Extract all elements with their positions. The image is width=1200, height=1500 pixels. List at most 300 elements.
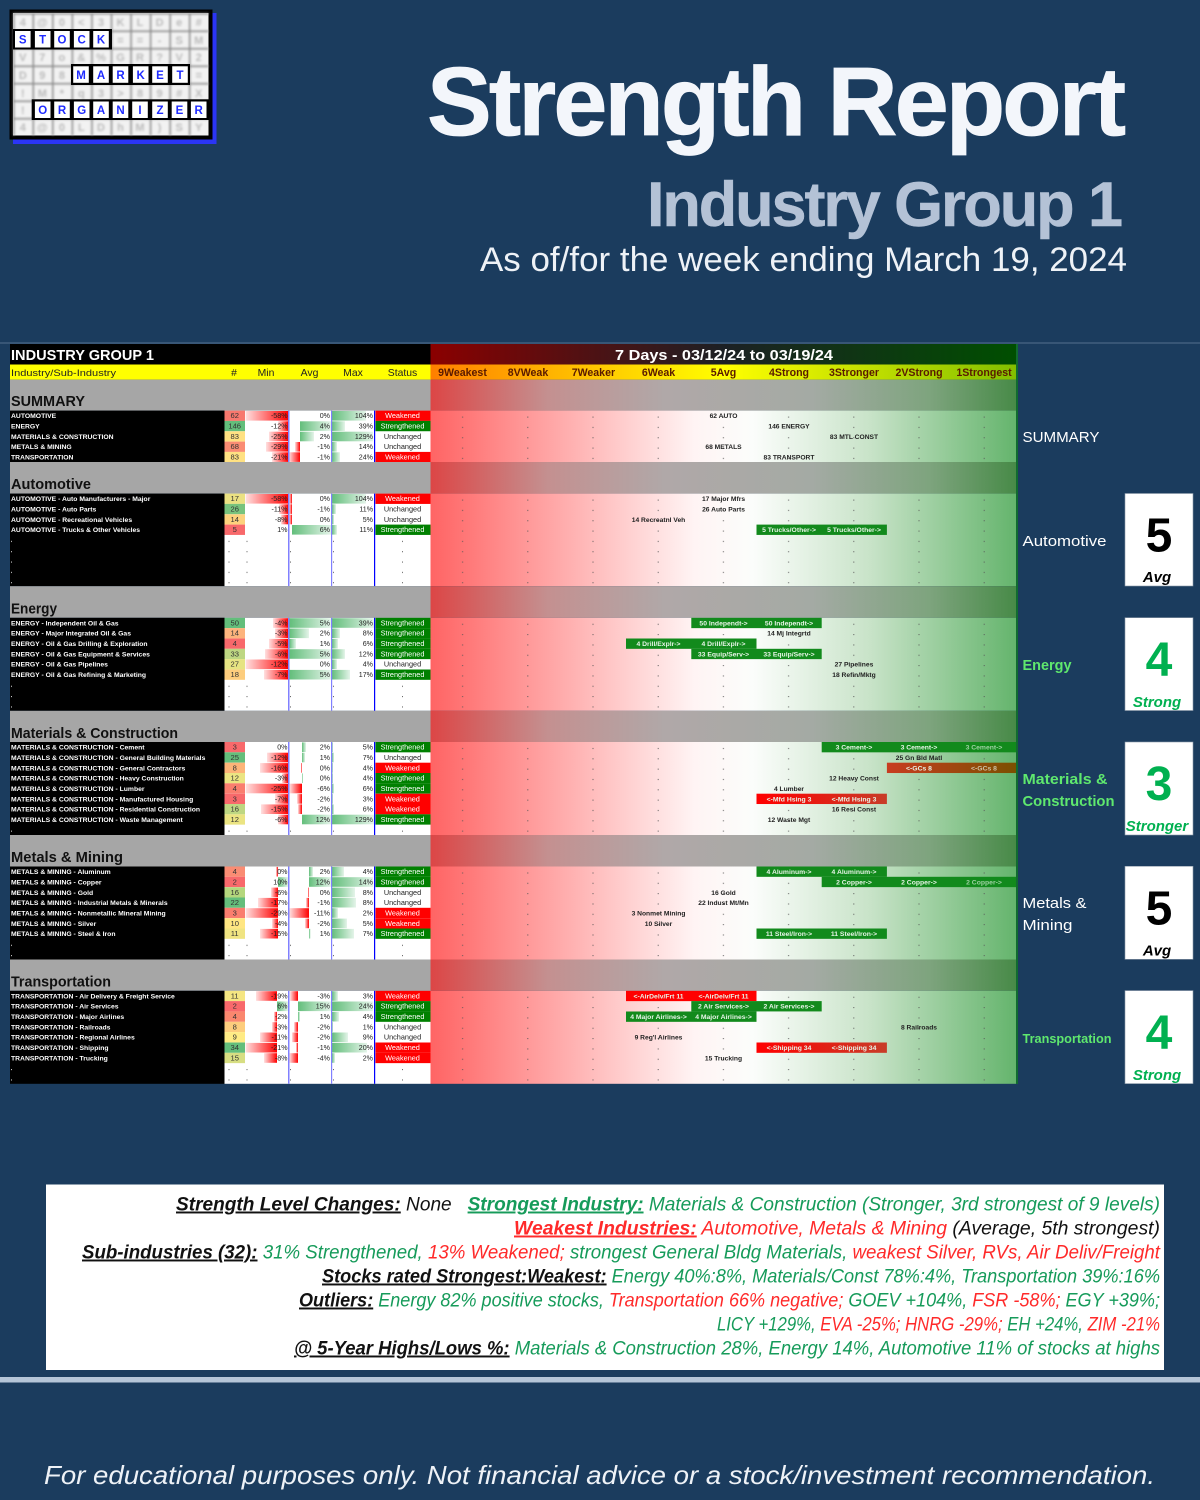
row: Major Integrated Oil & Gas: 8% [363, 630, 374, 638]
row: Auto Manufacturers: 104% [355, 495, 374, 503]
row: Silver: 5% [363, 920, 374, 928]
row: Shipping: 34 [230, 1043, 239, 1052]
row: General Building Materials: 7% [363, 754, 374, 762]
side label: Automotive: Automotive [1022, 533, 1106, 550]
row: Aluminum: 2% [320, 868, 331, 876]
row: Recreational Vehicles: 0% [320, 516, 331, 524]
row: Metals & Mining: 68 [230, 442, 239, 451]
score card: Energy: Strong [1133, 694, 1181, 711]
table header: Industry/Sub-Industry [11, 368, 116, 379]
row: Air Services: 24% [359, 1003, 374, 1011]
row: Cement: MATERIALS & CONSTRUCTION - Cement [11, 745, 145, 752]
table header: # [231, 368, 237, 379]
row: Regional Airlines: 9 Reg'l Airlines [635, 1035, 683, 1042]
row: Residential Construction [11, 804, 877, 814]
row: Cement: 5% [363, 744, 374, 752]
row: Air Delivery & Freight Service: -19% [271, 992, 288, 1000]
panel: commentary notes [46, 1184, 1164, 1370]
row: Trucks & Other Vehicles: 5 [233, 525, 237, 534]
score card: Transportation: 4 [1146, 1007, 1173, 1060]
row: Oil & Gas Pipelines: Unchanged [384, 660, 421, 669]
row: Oil & Gas Equipment & Services [11, 649, 822, 659]
row: Aluminum: 4 Aluminum-> [767, 869, 811, 876]
panel: Materials & Construction section [10, 711, 1018, 835]
row: Auto Parts: -1% [317, 506, 331, 514]
row: Copper: 10% [273, 878, 288, 886]
row: Trucks & Other Vehicles: 5 Trucks/Other-> [762, 527, 816, 534]
row: Energy [11, 421, 810, 431]
row: Auto Manufacturers: -58% [271, 495, 288, 503]
side label: Materials & Construction: Materials & [1022, 771, 1108, 788]
row: Oil & Gas Pipelines: 27 Pipelines [835, 662, 874, 669]
row: Heavy Construction: MATERIALS & CONSTRUCTION - Heavy Construction [11, 776, 184, 783]
score card: Automotive: Avg [1142, 569, 1171, 586]
row: Transportation: 24% [359, 454, 374, 462]
row: Residential Construction: 16 Resi Const [832, 807, 877, 814]
row: General Building Materials: 1% [320, 754, 331, 762]
row: Trucks & Other Vehicles: 6% [320, 526, 331, 534]
row: Independent Oil & Gas: 50 Independt-> [699, 620, 748, 627]
row: Trucking: 15 Trucking [705, 1055, 742, 1062]
row: Trucking [11, 1053, 742, 1063]
row: Manufactured Housing [11, 794, 887, 804]
row: Recreational Vehicles [11, 514, 685, 525]
row: Trucks & Other Vehicles: 5 Trucks/Other-> [827, 527, 881, 534]
row: Heavy Construction: 0% [320, 775, 331, 783]
row: Automotive [11, 411, 737, 421]
row: Steel & Iron: 11 Steel/Iron-> [766, 931, 812, 938]
row: Air Services: 2 [233, 1002, 237, 1011]
row: Gold: -6% [275, 889, 288, 897]
row: Waste Management: 129% [355, 816, 374, 824]
row: Waste Management: 12% [316, 816, 331, 824]
row: Automotive: 104% [355, 412, 374, 420]
row: Metals & Mining: 68 METALS [705, 444, 742, 451]
row: Recreational Vehicles: 14 Recreatnl Veh [632, 517, 685, 524]
row: Major Airlines: 4 [233, 1012, 237, 1021]
row: Trucks & Other Vehicles: 1% [277, 526, 288, 534]
heading: SUMMARY: SUMMARY [11, 393, 85, 410]
row: Industrial Metals & Minerals: 22 Indust Mt/Mn [698, 900, 749, 907]
row: Aluminum: 0% [277, 868, 288, 876]
table header: Max [343, 368, 364, 379]
row: Manufactured Housing: 3 [233, 794, 237, 803]
score card: Metals & Mining [1125, 866, 1193, 960]
logo: Stock Market Organizer: !M*q3>89#X [21, 88, 203, 100]
row: Air Delivery & Freight Service: Weakened [385, 991, 420, 1000]
row: Lumber: 4 [233, 784, 237, 793]
row: Steel & Iron: Strengthened [381, 929, 424, 938]
row: Lumber: -6% [317, 785, 331, 793]
row: Metals & Mining [11, 442, 742, 452]
row: Waste Management: MATERIALS & CONSTRUCTION - Waste Management [11, 817, 184, 824]
row: Industrial Metals & Minerals: 8% [363, 899, 374, 907]
row: Oil & Gas Equipment & Services: 33 Equip/Serv-> [763, 651, 815, 658]
row: Steel & Iron [11, 928, 887, 939]
row: Lumber: -25% [271, 785, 288, 793]
heading: Transportation: Transportation [11, 974, 111, 990]
row: Energy: 146 [228, 422, 241, 431]
score card: Materials & Construction [1125, 742, 1193, 835]
disclaimer footer: For educational purposes only. Not financial advice or a stock/investment recommendation. [44, 1460, 1155, 1490]
score card: Metals & Mining: Avg [1142, 942, 1171, 960]
table header [10, 344, 1018, 380]
row: Energy: Strengthened [381, 422, 424, 431]
row: Independent Oil & Gas [11, 618, 822, 628]
row: Auto Manufacturers: 17 Major Mfrs [702, 496, 745, 503]
row: Auto Parts [11, 504, 745, 514]
row: Oil & Gas Equipment & Services: 33 [230, 649, 239, 658]
row: Oil & Gas Refining & Marketing: 18 [230, 670, 239, 679]
row: Oil & Gas Drilling & Exploration: -5% [275, 640, 288, 648]
note: outliers: Outliers: Energy 82% positive stocks, Transportation 66% negative; GOEV +104%, FSR -58%; EGY +39%; [299, 1290, 1160, 1312]
row: Auto Parts: 26 [230, 505, 239, 514]
row: Automotive: Weakened [385, 411, 420, 420]
panel: Metals & Mining section [10, 835, 1018, 960]
row: Air Services: 2 Air Services-> [698, 1004, 749, 1011]
row: Regional Airlines: Unchanged [384, 1033, 421, 1042]
row: Materials & Construction: MATERIALS & CONSTRUCTION [11, 434, 114, 441]
row: Industrial Metals & Minerals: -17% [271, 899, 288, 907]
row: Major Integrated Oil & Gas: ENERGY - Major Integrated Oil & Gas [11, 631, 131, 638]
row: Waste Management: 12 Waste Mgt [768, 817, 811, 824]
row: Oil & Gas Drilling & Exploration: 1% [320, 640, 331, 648]
side label: Transportation: Transportation [1022, 1032, 1112, 1046]
row: Oil & Gas Refining & Marketing: ENERGY - Oil & Gas Refining & Marketing [11, 672, 146, 679]
row: Gold: 8% [363, 889, 374, 897]
row: Metals & Mining: -29% [271, 443, 288, 451]
row: Regional Airlines: 9 [233, 1033, 237, 1042]
row: Heavy Construction: 4% [363, 775, 374, 783]
row: Residential Construction: 6% [363, 806, 374, 814]
logo: Stock Market Organizer: ! [21, 105, 25, 117]
row: Oil & Gas Drilling & Exploration: 6% [363, 640, 374, 648]
table header: 4Strong [769, 367, 809, 379]
row: Regional Airlines: 9% [363, 1034, 374, 1042]
row: Recreational Vehicles: 14 [230, 515, 239, 524]
row: Aluminum [11, 866, 887, 877]
row: Energy: 39% [359, 423, 374, 431]
logo: Stock Market Organizer [10, 10, 216, 144]
row: Railroads: Unchanged [384, 1022, 421, 1031]
row: Oil & Gas Refining & Marketing [11, 670, 876, 680]
row: Transportation: 83 TRANSPORT [764, 455, 815, 462]
divider line [0, 342, 1200, 344]
side label: Energy: Energy [1022, 657, 1072, 674]
table header: 8VWeak [508, 367, 548, 379]
row: Major Integrated Oil & Gas: 14 [230, 629, 239, 638]
row: Gold: 16 [230, 888, 239, 897]
row: Silver: Weakened [385, 919, 420, 928]
row: Major Airlines: TRANSPORTATION - Major Airlines [11, 1014, 124, 1021]
row: Residential Construction: Weakened [385, 805, 420, 814]
score card: Energy [1125, 618, 1193, 711]
row: Air Services: 6% [277, 1003, 288, 1011]
row: Transportation: 83 [230, 453, 239, 462]
row: Copper [11, 877, 1017, 887]
row: Oil & Gas Pipelines [11, 659, 874, 669]
logo: Stock Market Organizer: MARKET [76, 70, 184, 82]
side label: Metals & Mining: Mining [1022, 917, 1072, 934]
row: Oil & Gas Pipelines: -12% [271, 661, 288, 669]
row: Copper: 2 [233, 877, 237, 886]
row: General Contractors: <-GCs 8 [906, 765, 932, 772]
row: Waste Management [11, 814, 811, 825]
row: Aluminum: METALS & MINING - Aluminum [11, 869, 111, 876]
row: Waste Management: 12 [230, 815, 239, 824]
row: Oil & Gas Equipment & Services: 12% [359, 650, 374, 658]
row: Regional Airlines: TRANSPORTATION - Regional Airlines [11, 1035, 135, 1042]
row: Transportation: -1% [317, 454, 331, 462]
row: Railroads: -3% [275, 1023, 288, 1031]
row: Metals & Mining: Unchanged [384, 442, 421, 451]
row: Shipping: -1% [317, 1044, 331, 1052]
row: Nonmetallic Mineral Mining: 3 Nonmet Mining [632, 910, 685, 917]
row: Silver: METALS & MINING - Silver [11, 921, 97, 928]
row: Auto Manufacturers: Weakened [385, 494, 420, 503]
row: General Building Materials: -12% [271, 754, 288, 762]
row: Gold: Unchanged [384, 888, 421, 897]
row: Oil & Gas Drilling & Exploration: 4 Drill/Explr-> [701, 641, 746, 648]
row: Manufactured Housing: <-Mfd Hsing 3 [832, 796, 877, 803]
row: Heavy Construction: -3% [275, 775, 288, 783]
row: Automotive: 62 AUTO [710, 413, 737, 420]
side label: Metals & Mining: Metals & [1022, 895, 1086, 912]
row: Auto Manufacturers [11, 494, 745, 504]
row: Nonmetallic Mineral Mining: 2% [363, 909, 374, 917]
score card: Materials & Construction: Stronger [1126, 818, 1189, 835]
row: General Building Materials: MATERIALS & CONSTRUCTION - General Building Materials [11, 755, 206, 762]
row: Railroads [11, 1022, 937, 1032]
row: Lumber: Strengthened [381, 784, 424, 793]
score card: Automotive: 5 [1146, 510, 1172, 562]
row: Automotive: 0% [320, 412, 331, 420]
row: Shipping: <-Shipping 34 [832, 1045, 877, 1052]
table header: 5Avg [711, 367, 736, 379]
side label: Metals & Mining [1022, 895, 1086, 934]
row: Major Integrated Oil & Gas [11, 628, 811, 638]
row: Cement: 3 [233, 743, 237, 752]
row: Trucks & Other Vehicles: 11% [359, 526, 374, 534]
row: Nonmetallic Mineral Mining: 3 [233, 908, 237, 917]
row: Copper: METALS & MINING - Copper [11, 879, 102, 886]
row: Silver: -2% [317, 920, 331, 928]
table header: Status [388, 368, 417, 379]
row: Steel & Iron: 1% [320, 930, 331, 938]
row: Steel & Iron: 11 Steel/Iron-> [831, 931, 877, 938]
row: Shipping: Weakened [385, 1043, 420, 1052]
row: Regional Airlines [11, 1032, 683, 1042]
row: Auto Manufacturers: 0% [320, 495, 331, 503]
row: Major Integrated Oil & Gas: Strengthened [381, 629, 424, 638]
row: Recreational Vehicles: 5% [363, 516, 374, 524]
table header: Avg [301, 368, 319, 379]
row: Trucks & Other Vehicles: AUTOMOTIVE - Trucks & Other Vehicles [11, 527, 140, 534]
title: Strength Report [427, 47, 1126, 156]
row: Oil & Gas Pipelines: 0% [320, 661, 331, 669]
row: Waste Management: Strengthened [381, 815, 424, 824]
row: Air Services [11, 1001, 822, 1011]
row: Transportation [11, 452, 815, 462]
subtitle: Industry Group 1 [647, 170, 1123, 240]
note: weakest industries: Weakest Industries: Automotive, Metals & Mining (Average, 5th strongest) [514, 1218, 1160, 1240]
row: Air Delivery & Freight Service: 11 [231, 991, 239, 1000]
logo: Stock Market Organizer: 4@0LDhM)SY [20, 122, 203, 134]
row: Transportation: -21% [271, 454, 288, 462]
row: Major Airlines: 4 Major Airlines-> [695, 1014, 752, 1021]
logo: Stock Market Organizer: D98= [19, 70, 202, 82]
row: Aluminum: Strengthened [381, 867, 424, 876]
row: Railroads: TRANSPORTATION - Railroads [11, 1024, 111, 1031]
row: Metals & Mining: 14% [359, 443, 374, 451]
row: Residential Construction: -15% [271, 806, 288, 814]
row: General Contractors: -16% [271, 764, 288, 772]
row: Air Delivery & Freight Service: TRANSPORTATION - Air Delivery & Freight Service [11, 993, 175, 1000]
logo: Stock Market Organizer: ORGANIZER [38, 105, 204, 117]
row: Materials & Construction: 83 [230, 432, 239, 441]
row: General Contractors: <-GCs 8 [971, 765, 997, 772]
side label: Materials & Construction: Construction [1022, 793, 1114, 810]
row: Nonmetallic Mineral Mining: -11% [314, 909, 331, 917]
table header: 1Strongest [956, 367, 1012, 379]
row: Cement: 3 Cement-> [966, 745, 1002, 752]
row: Auto Parts: 11% [359, 506, 374, 514]
row: Copper: 12% [316, 878, 331, 886]
row: Nonmetallic Mineral Mining: -29% [271, 909, 288, 917]
row: Auto Parts: -11% [271, 506, 288, 514]
row: Major Airlines: 4% [363, 1013, 374, 1021]
row: Shipping [11, 1042, 887, 1053]
row: Silver: -4% [275, 920, 288, 928]
row: General Building Materials [11, 752, 942, 763]
row: Lumber [11, 783, 804, 794]
table header: 3Stronger [829, 367, 879, 379]
row: Auto Parts: 26 Auto Parts [702, 507, 745, 514]
heading: Energy: Energy [11, 600, 58, 618]
row: Copper: 2 Copper-> [901, 879, 937, 886]
side label: Materials & Construction [1022, 771, 1114, 810]
logo: Stock Market Organizer: STOCK [19, 34, 106, 46]
row: Nonmetallic Mineral Mining [11, 908, 685, 918]
note: strength level changes: Strength Level Changes: None Strongest Industry: Materials & Construction (Stronger, 3rd strongest of 9 levels) [176, 1194, 1160, 1216]
row: Independent Oil & Gas: -4% [275, 619, 288, 627]
row: Materials & Construction: -25% [271, 433, 288, 441]
row: Oil & Gas Pipelines: ENERGY - Oil & Gas Pipelines [11, 662, 108, 669]
row: Transportation: Weakened [385, 453, 420, 462]
row: Materials & Construction [11, 431, 879, 442]
row: Cement: 3 Cement-> [901, 745, 937, 752]
row: Shipping: TRANSPORTATION - Shipping [11, 1045, 109, 1052]
row: Cement: 3 Cement-> [836, 745, 872, 752]
row: Residential Construction: MATERIALS & CONSTRUCTION - Residential Construction [11, 807, 200, 814]
row: Oil & Gas Equipment & Services: Strengthened [381, 649, 424, 658]
row: Industrial Metals & Minerals: METALS & MINING - Industrial Metals & Minerals [11, 900, 168, 907]
row: Shipping: 20% [359, 1044, 374, 1052]
row: Oil & Gas Equipment & Services: ENERGY - Oil & Gas Equipment & Services [11, 651, 150, 658]
row: Major Airlines [11, 1012, 756, 1022]
row: Major Airlines: -2% [275, 1013, 288, 1021]
row: Manufactured Housing: -7% [275, 795, 288, 803]
row: Independent Oil & Gas: Strengthened [381, 618, 424, 627]
row: Materials & Construction: 129% [355, 433, 374, 441]
logo: Stock Market Organizer: ==-SM [117, 35, 203, 47]
row: Copper: 2 Copper-> [836, 879, 872, 886]
row: Residential Construction: 16 [230, 805, 239, 814]
row: Automotive: 62 [230, 411, 239, 420]
row: Cement: 0% [277, 744, 288, 752]
row: Copper: 2 Copper-> [966, 879, 1002, 886]
row: Metals & Mining: -1% [317, 443, 331, 451]
score card: Automotive [1125, 494, 1193, 586]
heading: Automotive: Automotive [11, 476, 91, 493]
row: Trucks & Other Vehicles: Strengthened [381, 525, 424, 534]
row: Lumber: MATERIALS & CONSTRUCTION - Lumber [11, 786, 145, 793]
row: Independent Oil & Gas: ENERGY - Independent Oil & Gas [11, 620, 119, 627]
row: Trucking: TRANSPORTATION - Trucking [11, 1055, 108, 1062]
panel: Automotive section [10, 462, 1018, 586]
row: Aluminum: 4% [363, 868, 374, 876]
row: Energy: 146 ENERGY [768, 424, 810, 431]
row: Trucking: 2% [363, 1054, 374, 1062]
row: Air Services: Strengthened [381, 1002, 424, 1011]
table header: Min [258, 368, 275, 379]
row: Heavy Construction: 12 Heavy Const [829, 776, 880, 783]
row: Auto Parts: Unchanged [384, 505, 421, 514]
row: Independent Oil & Gas: 5% [320, 619, 331, 627]
score card: Transportation [1125, 991, 1193, 1084]
row: Cement: 2% [320, 744, 331, 752]
row: Major Airlines: 1% [320, 1013, 331, 1021]
row: Auto Parts: AUTOMOTIVE - Auto Parts [11, 507, 97, 514]
row: Air Delivery & Freight Service: -3% [317, 992, 331, 1000]
row: Oil & Gas Refining & Marketing: 5% [320, 671, 331, 679]
row: Trucking: 15 [230, 1053, 239, 1062]
table header: 9Weakest [438, 367, 487, 379]
row: Auto Manufacturers: AUTOMOTIVE - Auto Manufacturers - Major [11, 496, 151, 503]
score card: Metals & Mining: 5 [1146, 882, 1172, 936]
row: Automotive: -58% [271, 412, 288, 420]
note: stocks rated: Stocks rated Strongest:Weakest: Energy 40%:8%, Materials/Const 78%:4%, Transportation 39%:16% [322, 1266, 1160, 1288]
row: General Contractors: 8 [233, 763, 237, 772]
row: Heavy Construction: Strengthened [381, 774, 424, 783]
row: General Contractors: 4% [363, 764, 374, 772]
row: Cement [11, 742, 1017, 752]
row: Copper: Strengthened [381, 877, 424, 886]
row: Industrial Metals & Minerals [11, 898, 749, 908]
row: Steel & Iron: -15% [271, 930, 288, 938]
side label: SUMMARY: SUMMARY [1022, 429, 1100, 446]
row: Oil & Gas Drilling & Exploration: Strengthened [381, 639, 424, 648]
row: Aluminum: 4 [233, 867, 237, 876]
row: Oil & Gas Refining & Marketing: Strengthened [381, 670, 424, 679]
row: Steel & Iron: METALS & MINING - Steel & Iron [11, 931, 115, 938]
row: Oil & Gas Drilling & Exploration: 4 Drill/Explr-> [636, 641, 681, 648]
row: Energy: -12% [271, 423, 288, 431]
row: Regional Airlines: -11% [271, 1034, 288, 1042]
row: Energy: 4% [320, 423, 331, 431]
row: Silver: 10 [230, 919, 239, 928]
note: outliers continued: LICY +129%, EVA -25%; HNRG -29%; EH +24%, ZIM -21% [717, 1314, 1160, 1336]
row: Heavy Construction [11, 773, 880, 783]
logo: Stock Market Organizer: 4@0<3KLDe# [20, 17, 202, 29]
row: Recreational Vehicles: AUTOMOTIVE - Recreational Vehicles [11, 517, 132, 524]
row: Air Delivery & Freight Service: <-AirDelv/Frt 11 [633, 993, 684, 1000]
row: General Contractors [11, 763, 1017, 773]
row: Silver [11, 918, 673, 929]
row: Lumber: 6% [363, 785, 374, 793]
panel: SUMMARY section [10, 380, 1018, 462]
row: Oil & Gas Equipment & Services: -6% [275, 650, 288, 658]
